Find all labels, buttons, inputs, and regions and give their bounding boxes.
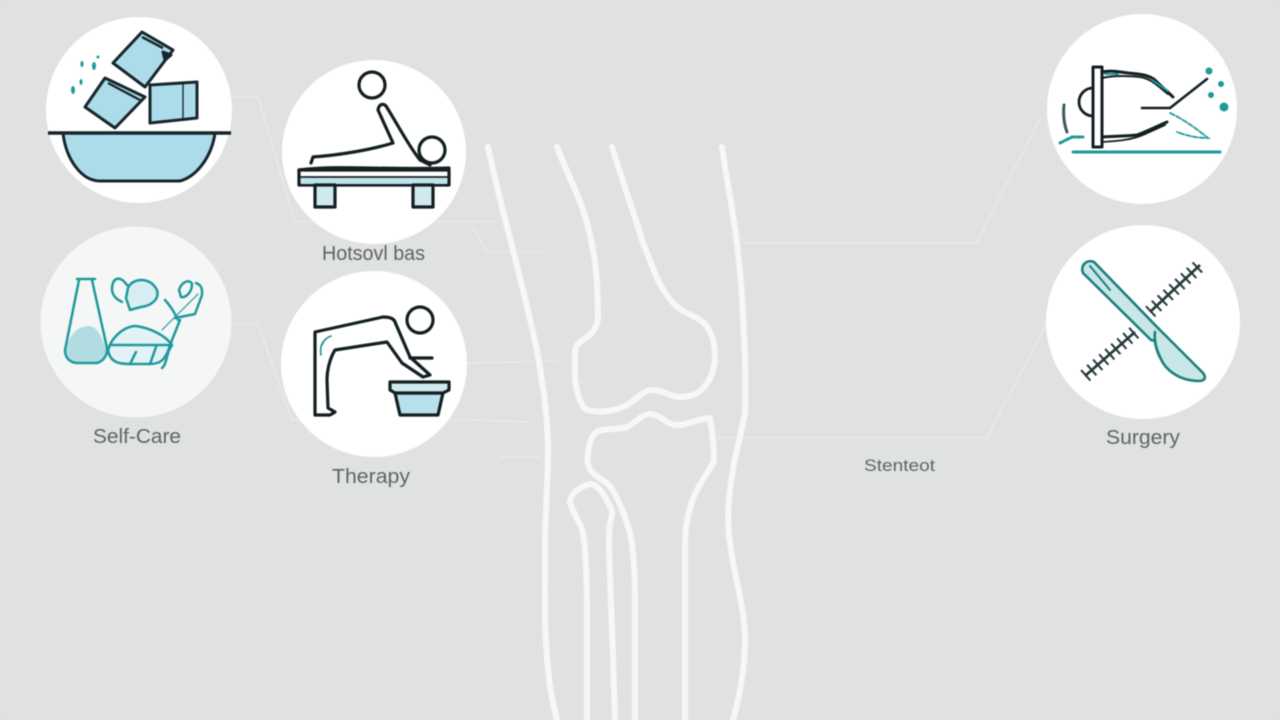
left leg contour bbox=[488, 147, 557, 720]
panel: massage table bbox=[282, 60, 466, 244]
icon: surgical instrument bbox=[1079, 67, 1207, 147]
icon: person on table bbox=[299, 72, 449, 207]
panel: therapy bbox=[281, 271, 467, 457]
icon: teal blade and accents bbox=[1060, 68, 1228, 152]
tibia bbox=[587, 414, 714, 720]
panel: surgery lower bbox=[1046, 225, 1240, 419]
icon: flask and food bbox=[65, 279, 202, 368]
icon: bowl bbox=[63, 133, 215, 181]
panel: ice bath bbox=[46, 17, 232, 203]
icon: person leaning over basin bbox=[315, 307, 449, 415]
knee joint anatomy outline bbox=[488, 147, 745, 720]
label: Stenteot: Stenteot bbox=[864, 456, 935, 475]
label: Self-Care: Self-Care bbox=[93, 426, 181, 448]
icon: sutures bbox=[1085, 265, 1200, 376]
panel: surgery upper bbox=[1047, 14, 1237, 204]
label: Therapy: Therapy bbox=[332, 466, 410, 488]
connector lines bbox=[232, 97, 1047, 457]
icon: ice cubes bbox=[85, 32, 197, 128]
femur bbox=[557, 147, 715, 412]
fibula bbox=[570, 484, 615, 720]
label: Hotsovl bas: Hotsovl bas bbox=[322, 243, 425, 265]
panel: self-care bbox=[40, 226, 232, 418]
icon: water droplets bbox=[71, 56, 100, 94]
label: Surgery: Surgery bbox=[1106, 427, 1180, 449]
right leg contour bbox=[722, 147, 745, 720]
icon: scalpel bbox=[1082, 261, 1205, 381]
